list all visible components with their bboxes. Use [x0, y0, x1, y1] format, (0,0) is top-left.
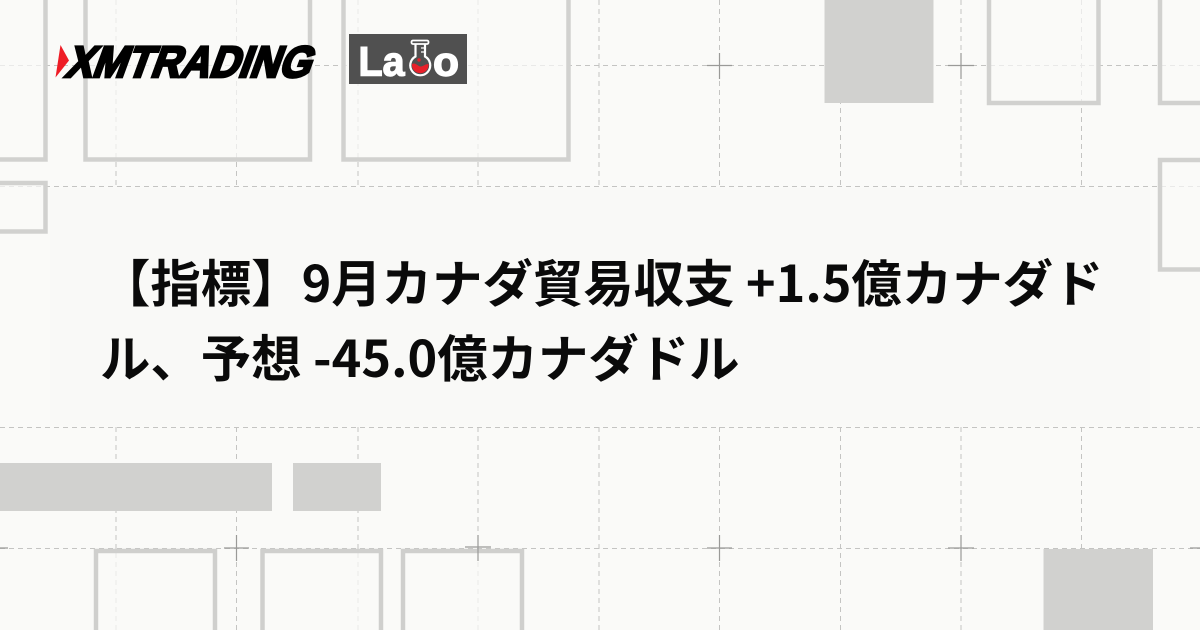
solid block: top: [824, 0, 934, 103]
wordmark right: o: [433, 38, 459, 84]
outlined box: top right: [989, 0, 1098, 103]
outlined box: small left: [0, 183, 46, 232]
title: [100, 244, 1103, 392]
title: 【指標】9月カナダ貿易収支 +1.5億カナダド: [100, 244, 1103, 317]
outlined box: bottom first: [96, 551, 215, 630]
solid block: bottom right: [1044, 549, 1153, 630]
outlined box: top far right: [1160, 0, 1200, 103]
logo: XMTRADING: [56, 38, 323, 86]
outlined box: bottom second: [262, 551, 381, 630]
icon: flask: [410, 40, 430, 75]
logo: Lab: [349, 34, 467, 84]
outlined box: middle far right: [1160, 160, 1200, 270]
outlined box: top left: [0, 0, 46, 160]
wordmark left: La: [358, 38, 406, 84]
outlined box: top second: [86, 0, 310, 160]
title: ル、予想 -45.0億カナダドル: [100, 319, 740, 392]
outlined box: top third: [344, 0, 568, 160]
solid block: long bar: [0, 463, 272, 511]
solid block: short bar: [293, 463, 381, 511]
outlined box: bottom third: [403, 551, 522, 630]
icon: red chevron: [56, 45, 69, 78]
panel: title backdrop: [50, 188, 1150, 426]
